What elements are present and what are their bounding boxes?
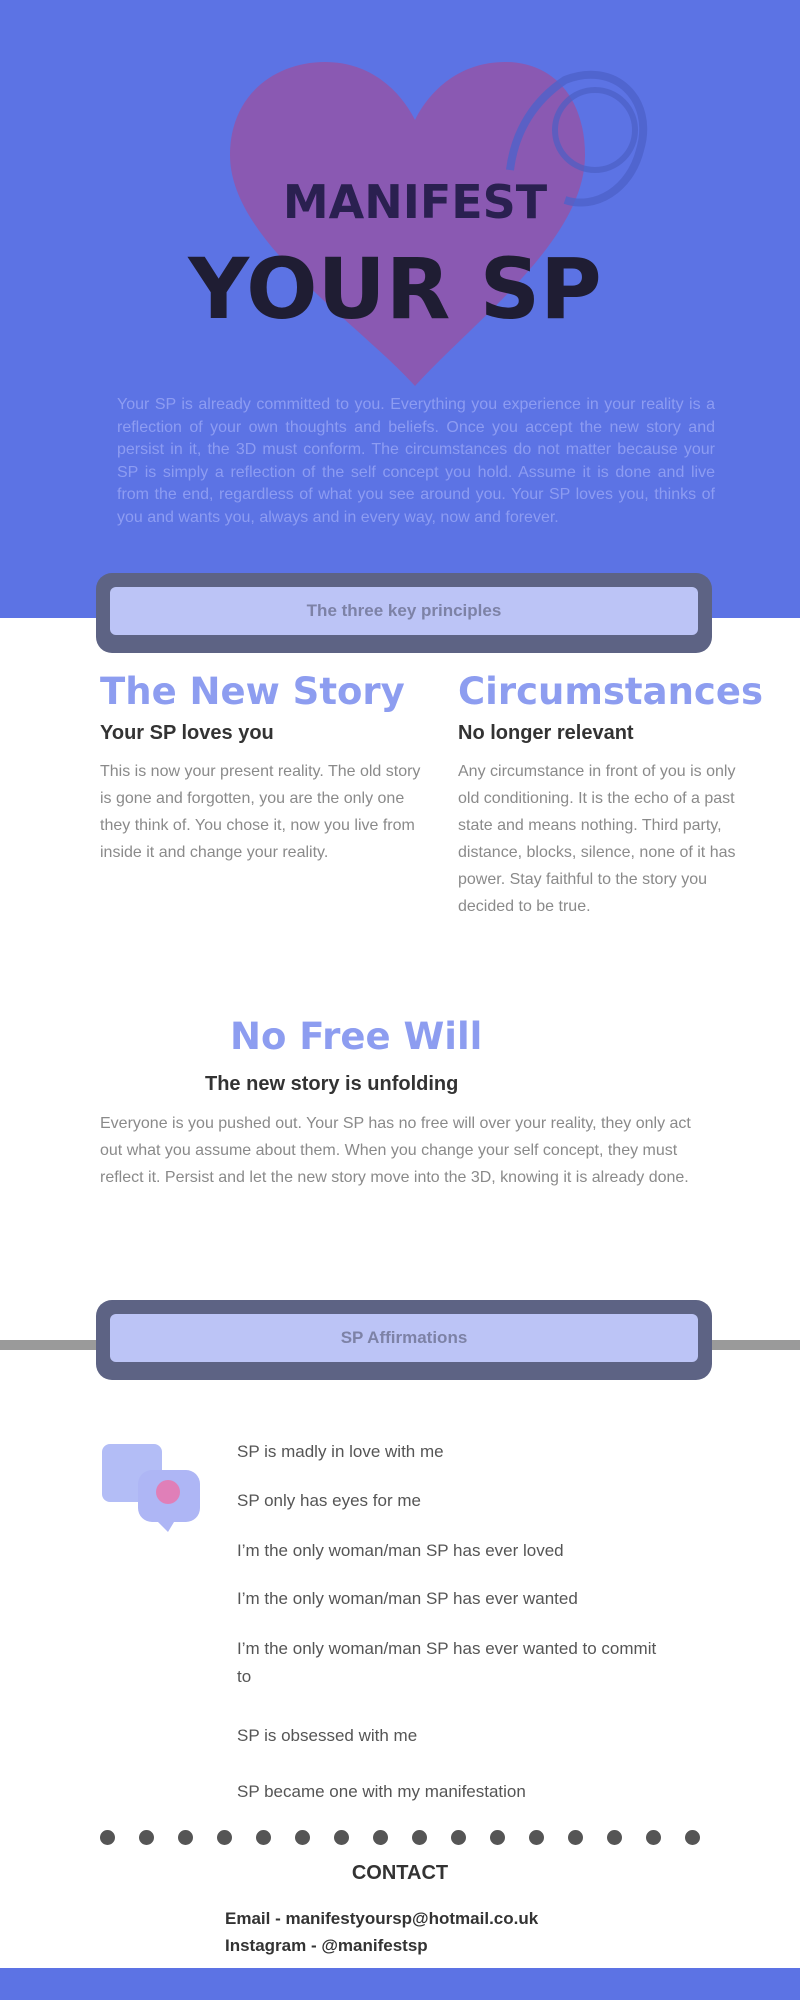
contact details [225, 1909, 538, 1955]
banner: the three key principles [96, 573, 712, 653]
affirmations list: SP is obsessed with me [237, 1726, 417, 1745]
affirmations list: I’m the only woman/man SP has ever wanted [237, 1589, 578, 1608]
contact details: Email - manifestyoursp@hotmail.co.uk [225, 1909, 538, 1928]
subheading: No longer relevant [458, 722, 634, 744]
body: Any circumstance in front of you is only old conditioning. It is the echo of a past state and means nothing. Third party, distance, blocks, silence, none of it has power. Stay faithful to the story you decided to be true. [458, 763, 736, 915]
heading: Circumstances [458, 670, 763, 713]
intro text: Your SP is already committed to you. Everything you experience in your reality is a reflection of your own thoughts and beliefs. Once you accept the new story and persist in it, the 3D must conform. The circumstances do not matter because your SP is simply a reflection of the self concept you hold. Assume it is done and live from the end, regardless of what you see around you. Your SP loves you, thinks of you and wants you, always and in every way, now and forever. [117, 396, 715, 526]
affirmations list [237, 1442, 656, 1801]
logo: heart with title: MANIFEST [283, 175, 548, 229]
contact heading: CONTACT [352, 1862, 448, 1884]
affirmations list: I’m the only woman/man SP has ever wanted to commit to [237, 1639, 656, 1686]
affirmations list: SP only has eyes for me [237, 1491, 421, 1510]
logo: heart with title: YOUR SP [187, 240, 602, 338]
affirmations list: I’m the only woman/man SP has ever loved [237, 1541, 564, 1560]
body: This is now your present reality. The old story is gone and forgotten, you are the only one they think of. You chose it, now you live from inside it and change your reality. [100, 763, 420, 861]
heading: No Free Will [230, 1015, 482, 1058]
header background [0, 0, 800, 618]
subheading: Your SP loves you [100, 722, 274, 744]
section: No Free Will [100, 1015, 691, 1186]
body: Everyone is you pushed out. Your SP has no free will over your reality, they only act out what you assume about them. When you change your self concept, they must reflect it. Persist and let the new story move into the 3D, knowing it is already done. [100, 1115, 691, 1186]
icon: chat bubbles with heart [102, 1444, 200, 1532]
divider line [0, 1340, 800, 1350]
affirmations list: SP is madly in love with me [237, 1442, 444, 1461]
banner: affirmations: SP Affirmations [341, 1328, 467, 1347]
dotted separator [100, 1830, 700, 1845]
contact details: Instagram - @manifestsp [225, 1936, 428, 1955]
footer bar [0, 1968, 800, 2000]
logo: heart with title [187, 62, 648, 386]
column: The New Story [100, 670, 420, 861]
affirmations list: SP became one with my manifestation [237, 1782, 526, 1801]
subheading: The new story is unfolding [205, 1073, 458, 1095]
column: Circumstances [458, 670, 763, 915]
heading: The New Story [100, 670, 405, 713]
banner: affirmations [96, 1300, 712, 1380]
banner: the three key principles: The three key principles [307, 601, 501, 620]
